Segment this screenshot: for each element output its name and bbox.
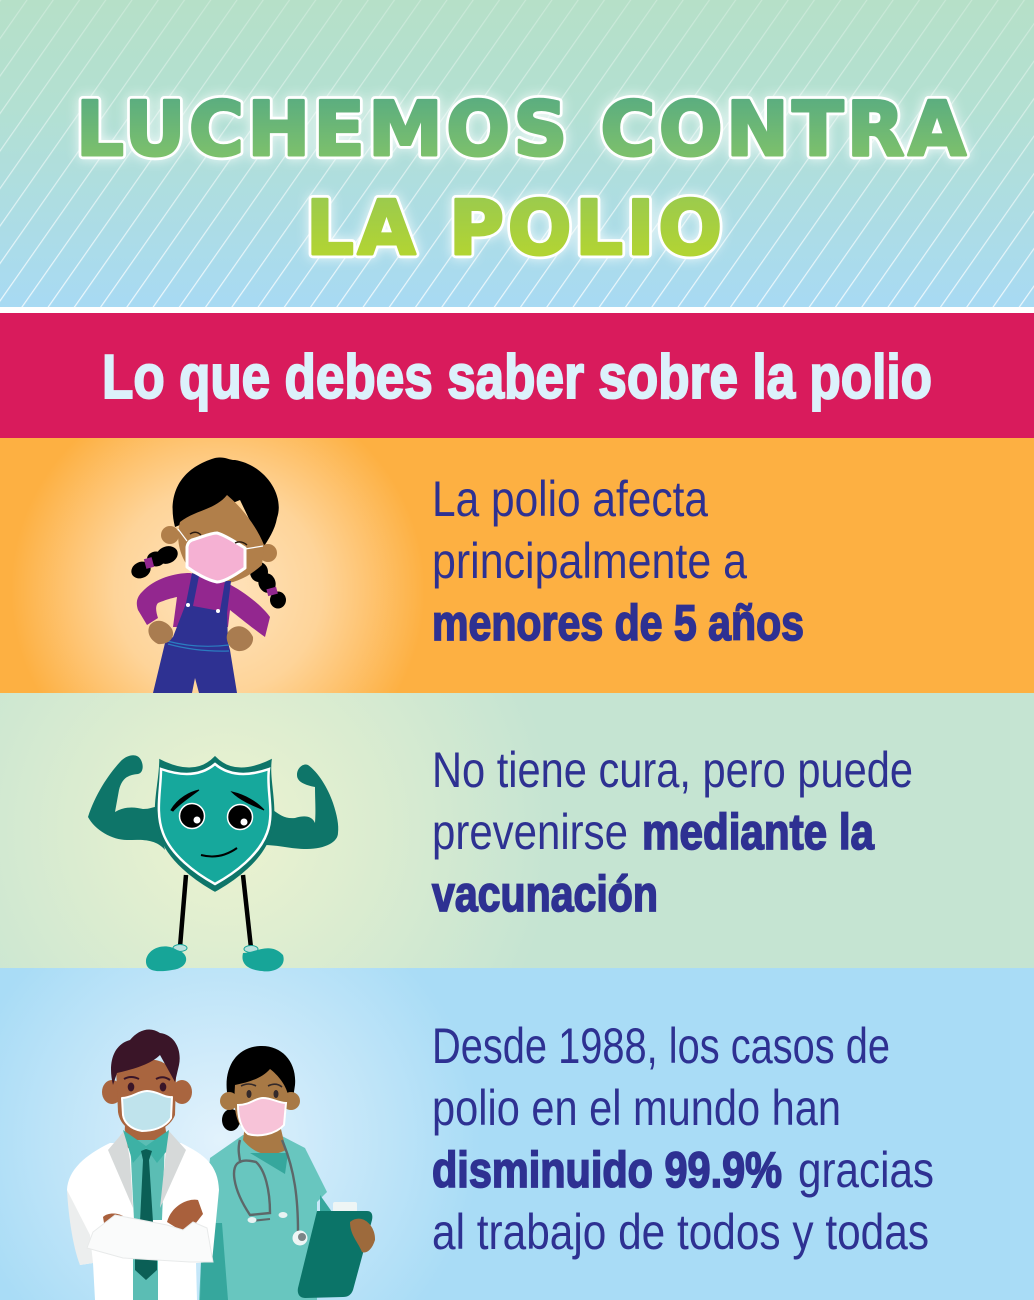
text: vaccination fact xyxy=(432,742,913,922)
icon: shield character xyxy=(88,755,338,971)
title: LUCHEMOS CONTRA xyxy=(76,85,966,173)
text: vaccination fact: No tiene cura, pero puede xyxy=(432,742,913,798)
title: LUCHEMOS CONTRA xyxy=(76,85,966,173)
title xyxy=(76,85,966,272)
text: progress fact: disminuido 99.9% xyxy=(432,1142,782,1198)
panel: vaccination fact xyxy=(0,693,1034,971)
text: vaccination fact: prevenirse xyxy=(432,804,628,860)
title: LA POLIO xyxy=(306,184,722,272)
panel: children fact xyxy=(0,438,1034,693)
text: progress fact: polio en el mundo han xyxy=(432,1080,841,1136)
icon: doctor xyxy=(67,1029,219,1300)
panel: subtitle banner xyxy=(0,313,1034,438)
text: progress fact: gracias xyxy=(798,1142,934,1198)
text: children fact: menores de 5 años xyxy=(432,595,804,651)
text: vaccination fact: vacunación xyxy=(432,866,658,922)
title: LA POLIO xyxy=(306,184,722,272)
text: progress fact: al trabajo de todos y todas xyxy=(432,1204,929,1260)
panel: title header xyxy=(0,0,1034,313)
text: vaccination fact: mediante la xyxy=(642,804,875,860)
title: LA POLIO xyxy=(306,184,722,272)
text: children fact xyxy=(432,471,804,651)
text: progress fact xyxy=(432,1018,934,1260)
icon: nurse xyxy=(199,1046,375,1300)
title: LUCHEMOS CONTRA xyxy=(76,85,966,173)
icon: girl with mask xyxy=(129,457,286,693)
text: progress fact: Desde 1988, los casos de xyxy=(432,1018,890,1074)
panel: progress fact xyxy=(0,968,1034,1300)
text: children fact: principalmente a xyxy=(432,533,747,589)
text: children fact: La polio afecta xyxy=(432,471,708,527)
